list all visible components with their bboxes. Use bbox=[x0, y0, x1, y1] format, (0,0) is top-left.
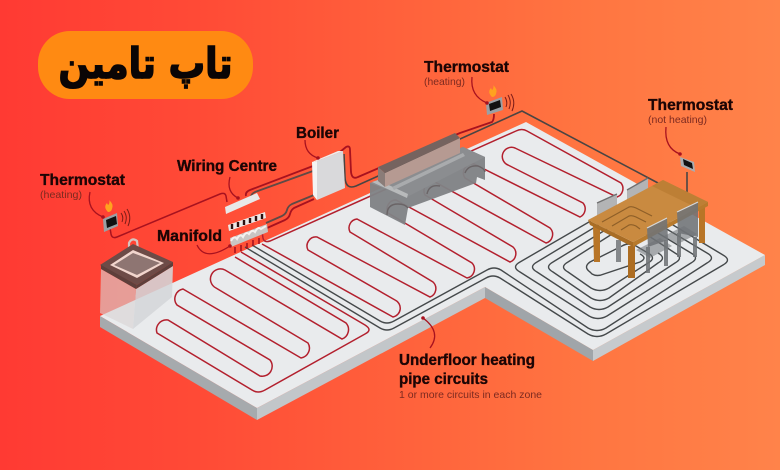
sofa bbox=[370, 133, 485, 225]
label: underfloor heating pipe circuits bbox=[399, 352, 542, 401]
thermostat right (not heating) bbox=[680, 157, 695, 172]
wiring centre bbox=[225, 193, 260, 214]
thermostat middle (heating) with flame and signal bbox=[486, 85, 514, 115]
floor slab bbox=[100, 122, 765, 420]
label: thermostat right bbox=[648, 97, 733, 126]
label: thermostat right: Thermostat bbox=[648, 97, 733, 114]
sink unit bbox=[100, 239, 173, 329]
chairs behind table bbox=[597, 178, 648, 262]
boiler bbox=[312, 151, 345, 200]
label: manifold: Manifold bbox=[157, 228, 222, 245]
callout dots bbox=[101, 101, 682, 320]
label: wiring centre: Wiring Centre bbox=[177, 158, 277, 175]
manifold bbox=[228, 212, 268, 253]
dark pipe circuit: dining zone spiral bbox=[245, 202, 728, 336]
red pipe circuit: left zone bbox=[157, 252, 369, 392]
wiring between thermostats, wiring centre, boiler and manifold bbox=[110, 111, 687, 238]
label: thermostat left: (heating) bbox=[40, 189, 82, 201]
title badge: تاپ تامین bbox=[58, 39, 232, 89]
label: thermostat middle bbox=[424, 59, 509, 88]
front chairs bbox=[636, 202, 698, 273]
red pipe circuit: middle zone bbox=[262, 130, 623, 317]
label: thermostat left bbox=[40, 172, 125, 201]
label: underfloor heating pipe circuits: Underfloor heating bbox=[399, 352, 535, 369]
thermostat left (heating) with flame and signal bbox=[103, 200, 130, 232]
label: thermostat left: Thermostat bbox=[40, 172, 125, 189]
label: thermostat middle: (heating) bbox=[424, 76, 465, 88]
title badge bbox=[38, 31, 253, 99]
label: underfloor heating pipe circuits: pipe circuits bbox=[399, 371, 488, 388]
label: thermostat middle: Thermostat bbox=[424, 59, 509, 76]
callout lines bbox=[89, 77, 680, 348]
label: underfloor heating pipe circuits: 1 or more circuits in each zone bbox=[399, 389, 542, 401]
label: boiler: Boiler bbox=[296, 125, 339, 142]
dining table bbox=[588, 180, 708, 278]
label: thermostat right: (not heating) bbox=[648, 114, 707, 126]
